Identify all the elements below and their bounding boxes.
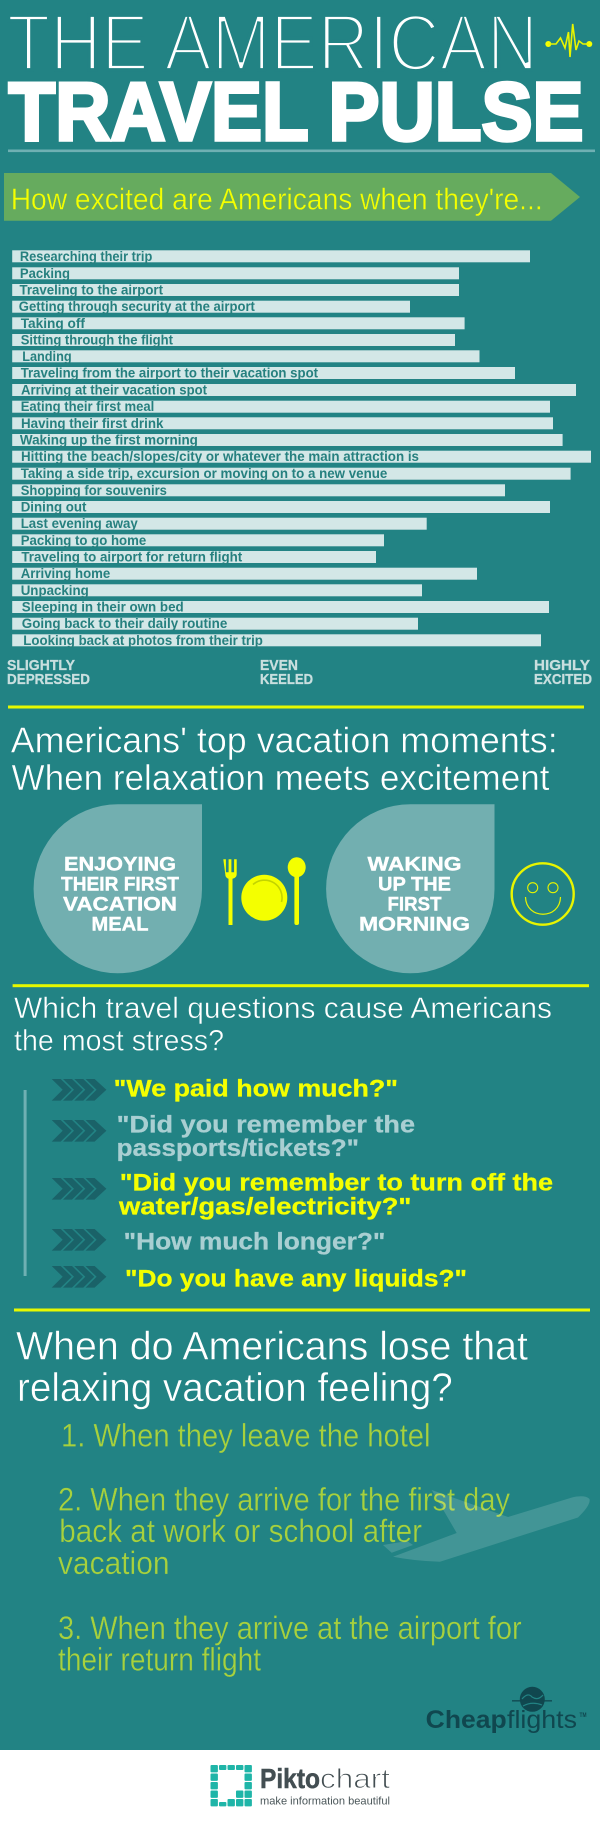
bar: Sleeping in own bed [12, 598, 549, 614]
scale label: slightly depressed [7, 657, 90, 688]
panel: waking up the first morning: FIRST [388, 894, 442, 916]
question 3 [52, 1170, 553, 1220]
bar: Unpacking [12, 582, 422, 598]
panel: waking up the first morning [326, 804, 494, 973]
bar: Packing to go home: Packing to go home [21, 532, 146, 548]
bar: Taking off [12, 315, 465, 331]
logo: Piktochart: chart [320, 1763, 390, 1794]
bar: Eating first meal [12, 398, 550, 414]
bar: Packing [12, 265, 459, 281]
scale label: even keeled: EVEN [260, 657, 298, 674]
scale label: highly excited: EXCITED [534, 671, 592, 688]
logo: Cheapflights: TM [580, 1713, 586, 1719]
panel: first vacation meal: ENJOYING [64, 854, 176, 876]
bar: Arriving at vacation spot [12, 382, 576, 398]
scale label: highly excited [534, 657, 592, 688]
bar: Shopping [12, 482, 505, 498]
bar: Packing: Packing [20, 265, 70, 281]
bar: Looking back at photos [12, 632, 541, 648]
question 2 [52, 1112, 415, 1162]
bar: Hitting the beach: Hitting the beach/slopes/city or whatever the main attraction is [21, 448, 419, 464]
scale label: even keeled: KEELED [260, 671, 313, 688]
heading: stress questions: the most stress? [14, 1025, 224, 1058]
question 4: "How much longer?" [124, 1228, 385, 1255]
bar: Going back to routine [12, 615, 418, 631]
question 3: "Did you remember to turn off the [120, 1170, 553, 1197]
logo: Piktochart [210, 1763, 390, 1807]
bar: Arriving at vacation spot: Arriving at their vacation spot [21, 382, 207, 398]
bar: Sleeping in own bed: Sleeping in their own bed [22, 598, 184, 614]
bar: Dining out: Dining out [21, 498, 87, 514]
heading: stress questions [14, 992, 552, 1058]
bar: Last evening: Last evening away [21, 515, 138, 531]
heading: lose that vacation feeling [16, 1324, 528, 1410]
logo: Piktochart: make information beautiful [260, 1795, 390, 1807]
panel: first vacation meal: MEAL [92, 914, 149, 936]
text block: list of moments [58, 1418, 522, 1678]
text block: list of moments: back at work or school after [59, 1513, 422, 1549]
panel: first vacation meal: THEIR FIRST [61, 874, 179, 896]
bar: Landing: Landing [22, 348, 72, 364]
text block: list of moments: 1. When they leave the hotel [61, 1418, 430, 1454]
bar: Packing to go home [12, 532, 384, 548]
logo: Piktochart: Pikto [260, 1763, 320, 1794]
bar: Looking back at photos: Looking back at photos from their trip [23, 632, 263, 648]
bar: Going back to routine: Going back to their daily routine [22, 615, 227, 631]
bar: Waking up: Waking up the first morning [20, 432, 198, 448]
banner arrow: How excited are Americans when they're... [11, 181, 543, 216]
question 1: "We paid how much?" [114, 1076, 398, 1103]
bar: Taking a side trip [12, 465, 571, 481]
bar: Taking a side trip: Taking a side trip, excursion or moving on to a new venue [21, 465, 387, 481]
bar: Traveling from the airport: Traveling from the airport to their vacation spot [21, 364, 318, 380]
heading: stress questions: Which travel questions cause Americans [14, 992, 552, 1025]
icon: airplane silhouette [383, 1490, 590, 1562]
bar: Taking off: Taking off [21, 315, 85, 331]
text block: list of moments: 2. When they arrive for the first day [58, 1482, 510, 1518]
bar: Last evening [12, 515, 427, 531]
heading: top vacation moments [11, 719, 558, 798]
question 2: "Did you remember the [117, 1112, 415, 1139]
bar: Traveling to airport for return [12, 548, 376, 564]
bar: Researching their trip: Researching their trip [20, 248, 152, 264]
panel: first vacation meal [34, 804, 202, 973]
icon: pulse line [545, 24, 592, 57]
icon: smiley face [512, 863, 574, 925]
question 3: water/gas/electricity?" [118, 1193, 411, 1220]
heading: top vacation moments: Americans' top vacation moments: [11, 719, 558, 760]
bar: Traveling to the airport [12, 282, 459, 298]
logo: Cheapflights: flights [507, 1706, 577, 1734]
bar: Traveling from the airport [12, 364, 515, 380]
bar: Traveling to the airport: Traveling to the airport [20, 282, 163, 298]
bar: Traveling to airport for return: Traveling to airport for return flight [21, 548, 243, 564]
text block: list of moments: their return flight [58, 1642, 261, 1678]
bar: Sitting through the flight: Sitting through the flight [21, 332, 173, 348]
bar: Having first drink [12, 415, 553, 431]
panel: waking up the first morning: UP THE [378, 874, 451, 896]
bar: Getting through security [12, 298, 410, 314]
panel: waking up the first morning: MORNING [359, 914, 470, 936]
bar: Getting through security: Getting through security at the airport [19, 298, 255, 314]
text block: list of moments: 3. When they arrive at the airport for [58, 1610, 522, 1646]
bar: Sitting through the flight [12, 332, 455, 348]
logo: Cheapflights [426, 1687, 586, 1734]
text block: list of moments: vacation [58, 1545, 170, 1581]
scale label: slightly depressed: DEPRESSED [7, 671, 90, 688]
bar: Eating first meal: Eating their first meal [21, 398, 154, 414]
scale label: highly excited: HIGHLY [534, 657, 590, 674]
logo: Cheapflights: Cheap [426, 1706, 507, 1734]
bar: Dining out [12, 498, 550, 514]
bar: Arriving home: Arriving home [21, 565, 110, 581]
bar: Researching their trip [12, 248, 530, 264]
bar: Having first drink: Having their first drink [21, 415, 164, 431]
heading: lose that vacation feeling: When do Americans lose that [16, 1324, 528, 1368]
footer band [0, 1750, 600, 1823]
icon: fork, plate and spoon [223, 857, 306, 925]
panel: waking up the first morning: WAKING [368, 854, 462, 876]
heading: top vacation moments: When relaxation meets excitement [12, 757, 550, 798]
bar chart: excitement [12, 248, 591, 648]
title [7, 0, 584, 158]
bar: Unpacking: Unpacking [21, 582, 89, 598]
question 2: passports/tickets?" [117, 1135, 359, 1162]
heading: lose that vacation feeling: relaxing vacation feeling? [17, 1366, 453, 1410]
scale label: even keeled [260, 657, 313, 688]
scale label: slightly depressed: SLIGHTLY [7, 657, 75, 674]
bar: Arriving home [12, 565, 477, 581]
question 5: "Do you have any liquids?" [125, 1266, 467, 1293]
bar: Waking up [12, 432, 563, 448]
bar: Landing [12, 348, 479, 364]
panel: first vacation meal: VACATION [63, 894, 177, 916]
bar: Shopping: Shopping for souvenirs [21, 482, 167, 498]
